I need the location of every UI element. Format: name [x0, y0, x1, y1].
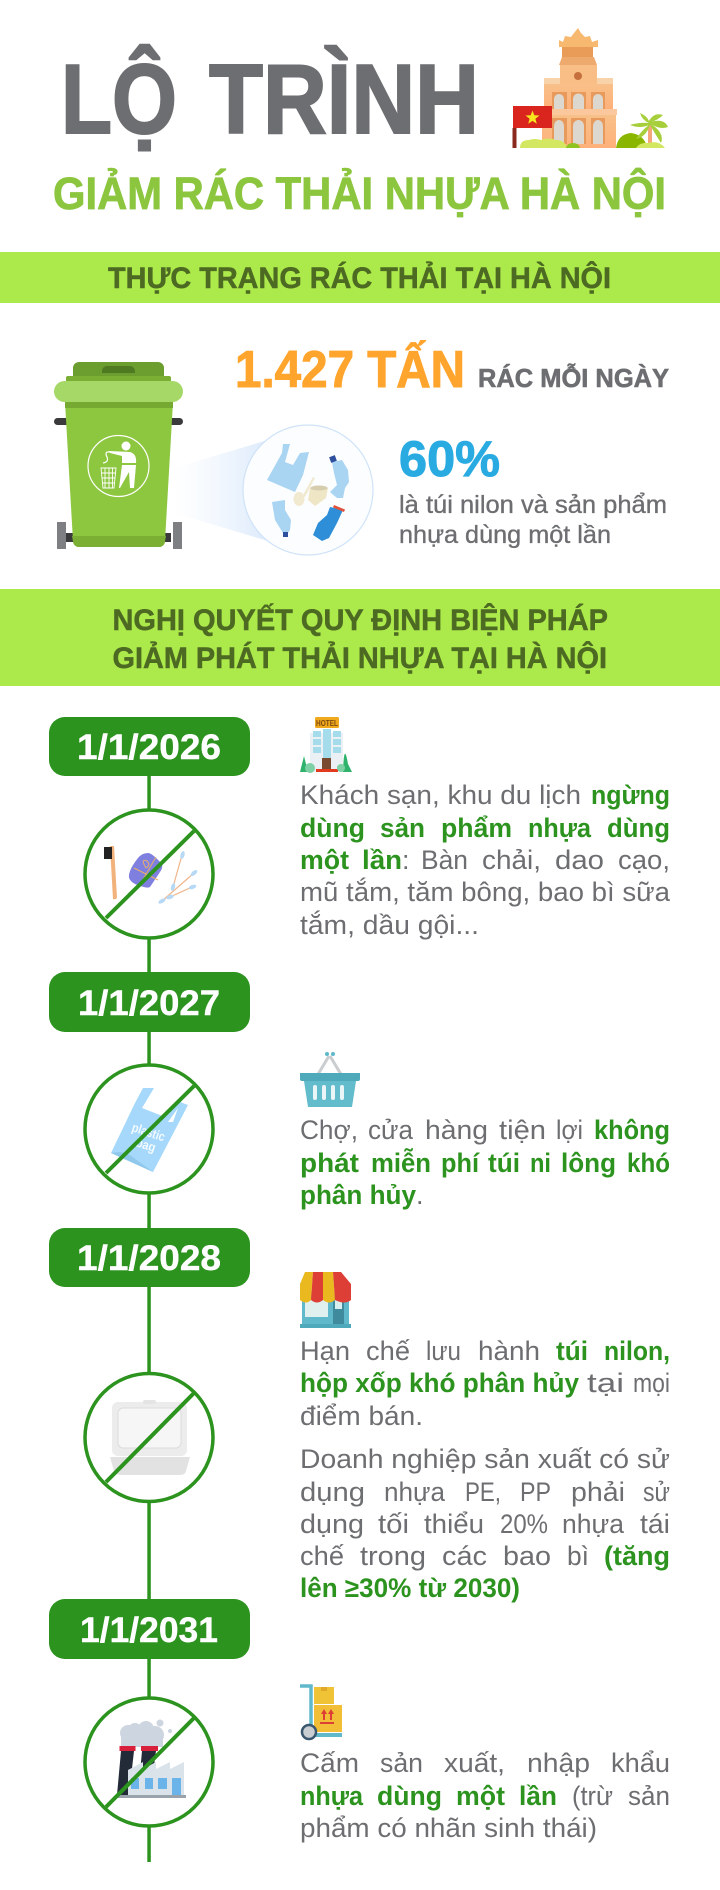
stat: 60%: là túi nilon và sản phẩm: [399, 491, 667, 519]
text block: 2028 shops and recycled plastic: tái: [640, 1509, 670, 1539]
title: Lộ trình: LỘ: [61, 44, 177, 154]
banner: resolution: [0, 589, 720, 686]
text block: 2028 shops and recycled plastic: 20%: [500, 1509, 548, 1539]
text block: 2027 markets: khó: [627, 1148, 670, 1178]
text block: 2031 ban: Cấm: [300, 1748, 359, 1778]
ban sign: factory: [85, 1698, 213, 1826]
text block: 2031 ban: nhập: [527, 1748, 590, 1778]
text block: 2027 markets: tiện: [499, 1115, 546, 1145]
circle: plastic waste: [243, 425, 373, 555]
text block: 2028 shops and recycled plastic: (tăng: [604, 1541, 670, 1571]
text block: 2027 markets: ni: [530, 1148, 551, 1178]
text block: 2027 markets: cửa: [368, 1115, 414, 1145]
text block: 2028 shops and recycled plastic: PE,: [465, 1477, 501, 1507]
banner: current situation: [0, 252, 720, 303]
text block: 2026 hotels: dùng: [607, 813, 670, 843]
panel: current situation: [54, 340, 669, 555]
text block: 2028 shops and recycled plastic: trong: [360, 1541, 426, 1571]
text block: 2028 shops and recycled plastic: bao: [503, 1541, 551, 1571]
title: Lộ trình: [61, 44, 479, 154]
text block: 2031 ban: sản: [628, 1781, 670, 1811]
text block: 2028 shops and recycled plastic: túi: [556, 1336, 588, 1366]
text block: 2028 shops and recycled plastic: lưu: [426, 1336, 461, 1366]
title: Lộ trình: TRÌNH: [209, 44, 479, 154]
banner: resolution: GIẢM PHÁT THẢI NHỰA TẠI HÀ NỘI: [112, 641, 607, 675]
text block: 2028 shops and recycled plastic: điểm bán.: [300, 1401, 423, 1431]
date pill: 1/1/2027: [49, 972, 250, 1032]
text block: 2026 hotels: Khách sạn, khu du lịch: [300, 780, 581, 810]
text block: 2028 shops and recycled plastic: dụng: [300, 1509, 364, 1539]
subtitle: GIẢM RÁC THẢI NHỰA HÀ NỘI: [53, 168, 666, 219]
date pill: 1/1/2028: [49, 1228, 250, 1287]
text block: 2031 ban: nhựa: [300, 1781, 364, 1811]
text block: 2027 markets: hàng: [425, 1115, 488, 1145]
text block: 2028 shops and recycled plastic: chế: [366, 1336, 410, 1366]
text block: 2026 hotels: sản: [380, 813, 425, 843]
text block: 2026 hotels: ngừng: [591, 780, 670, 810]
text block: 2028 shops and recycled plastic: mọi: [633, 1368, 670, 1398]
text block: 2028 shops and recycled plastic: hành: [478, 1336, 540, 1366]
text block: 2028 shops and recycled plastic: tối: [378, 1509, 409, 1539]
text block: 2028 shops and recycled plastic: hộp xốp khó phân hủy: [300, 1368, 579, 1398]
text block: 2027 markets: lông: [561, 1148, 616, 1178]
text block: 2026 hotels: tắm, dầu gội...: [300, 909, 479, 940]
text block: 2028 shops and recycled plastic: nhựa: [562, 1509, 625, 1539]
text block: 2031 ban: dùng: [377, 1781, 442, 1811]
ban sign: plastic bag: plastic: [130, 1120, 167, 1144]
ban sign: plastic bag: [85, 1065, 213, 1193]
text block: 2031 ban: [300, 1686, 670, 1843]
stat: 1.427 tons: RÁC MỖI NGÀY: [478, 363, 669, 393]
text block: 2031 ban: (trừ: [572, 1781, 613, 1811]
text block: 2026 hotels: cạo,: [618, 845, 670, 875]
text block: 2027 markets: không: [594, 1115, 670, 1145]
text block: 2028 shops and recycled plastic: Hạn: [300, 1336, 350, 1366]
text block: 2028 shops and recycled plastic: chế: [300, 1541, 344, 1571]
ban sign: plastic bag: bag: [134, 1135, 158, 1155]
banner: current situation: THỰC TRẠNG RÁC THẢI TẠI HÀ NỘI: [108, 261, 611, 295]
icon: shop: [300, 1272, 351, 1328]
stat: 60%: nhựa dùng một lần: [399, 521, 611, 549]
timeline spine: [147, 776, 151, 1862]
date pill: 1/1/2026: [49, 717, 250, 776]
text block: 2026 hotels: :: [402, 845, 410, 875]
text block: 2028 shops and recycled plastic: dụng: [300, 1477, 365, 1507]
icon: shopping basket: [300, 1052, 360, 1107]
text block: 2027 markets: lợi: [556, 1115, 583, 1145]
icon: hand truck with boxes: [300, 1686, 342, 1739]
text block: 2031 ban: lần: [519, 1781, 557, 1811]
text block: 2028 shops and recycled plastic: phải: [571, 1477, 625, 1507]
text block: 2027 markets: Chợ,: [300, 1115, 358, 1145]
text block: 2026 hotels: phẩm: [441, 813, 512, 843]
text block: 2028 shops and recycled plastic: Doanh nghiệp sản xuất có sử: [300, 1444, 670, 1474]
text block: 2027 markets: miễn: [371, 1147, 431, 1178]
text block: 2027 markets: [300, 1052, 670, 1210]
text block: 2026 hotels: [300, 717, 671, 940]
text block: 2026 hotels: dao: [555, 845, 604, 875]
text block: 2028 shops and recycled plastic: [300, 1272, 670, 1603]
date pill: 1/1/2027: 1/1/2027: [78, 984, 220, 1023]
text block: 2028 shops and recycled plastic: PP: [520, 1477, 551, 1507]
text block: 2027 markets: phát: [300, 1148, 359, 1178]
text block: 2031 ban: xuất,: [444, 1748, 505, 1778]
text block: 2027 markets: phân hủy: [300, 1180, 416, 1210]
text block: 2027 markets: phí: [441, 1148, 480, 1178]
text block: 2028 shops and recycled plastic: các: [442, 1541, 487, 1571]
text block: 2027 markets: .: [416, 1180, 424, 1210]
date pill: 1/1/2031: 1/1/2031: [80, 1611, 218, 1650]
text block: 2031 ban: một: [456, 1781, 505, 1811]
icon: Hanoi flag tower with Vietnamese flag and palm: [512, 28, 668, 148]
text block: 2026 hotels: một: [300, 845, 349, 875]
icon: green trash bin: [54, 362, 183, 549]
text block: 2031 ban: khẩu: [611, 1748, 670, 1778]
banner: resolution: NGHỊ QUYẾT QUY ĐỊNH BIỆN PHÁP: [112, 603, 608, 637]
text block: 2028 shops and recycled plastic: bì: [567, 1541, 589, 1571]
text block: 2028 shops and recycled plastic: thiểu: [424, 1509, 484, 1539]
date pill: 1/1/2026: 1/1/2026: [77, 728, 221, 767]
text block: 2027 markets: túi: [488, 1148, 520, 1178]
icon: hotel: [300, 717, 352, 773]
text block: 2031 ban: phẩm có nhãn sinh thái): [300, 1813, 597, 1843]
text block: 2026 hotels: mũ tắm, tăm bông, bao bì sữa: [300, 876, 671, 907]
text block: 2026 hotels: dùng: [300, 813, 365, 843]
date pill: 1/1/2031: [49, 1599, 250, 1659]
text block: 2028 shops and recycled plastic: lên ≥30% từ 2030): [300, 1573, 520, 1603]
text block: 2028 shops and recycled plastic: nilon,: [604, 1336, 670, 1366]
stat: 60%: 60%: [399, 431, 500, 487]
text block: 2028 shops and recycled plastic: nhựa: [384, 1477, 446, 1507]
text block: 2026 hotels: lần: [362, 845, 402, 875]
text block: 2031 ban: sản: [380, 1748, 423, 1778]
stat: 60%: [399, 431, 667, 549]
stat: 1.427 tons: 1.427 TẤN: [235, 340, 465, 399]
zoom cone: [174, 440, 268, 541]
ban sign: foam box: [85, 1374, 213, 1502]
stat: 1.427 tons: [235, 340, 669, 399]
ban sign: toiletries: [85, 810, 213, 938]
text block: 2026 hotels: Bàn: [421, 845, 468, 875]
date pill: 1/1/2028: 1/1/2028: [77, 1239, 221, 1278]
icon: hotel: HOTEL: [316, 719, 338, 728]
text block: 2026 hotels: chải,: [482, 845, 541, 875]
text block: 2028 shops and recycled plastic: sử: [643, 1477, 670, 1507]
text block: 2026 hotels: nhựa: [528, 813, 592, 843]
text block: 2028 shops and recycled plastic: tại: [587, 1368, 624, 1398]
